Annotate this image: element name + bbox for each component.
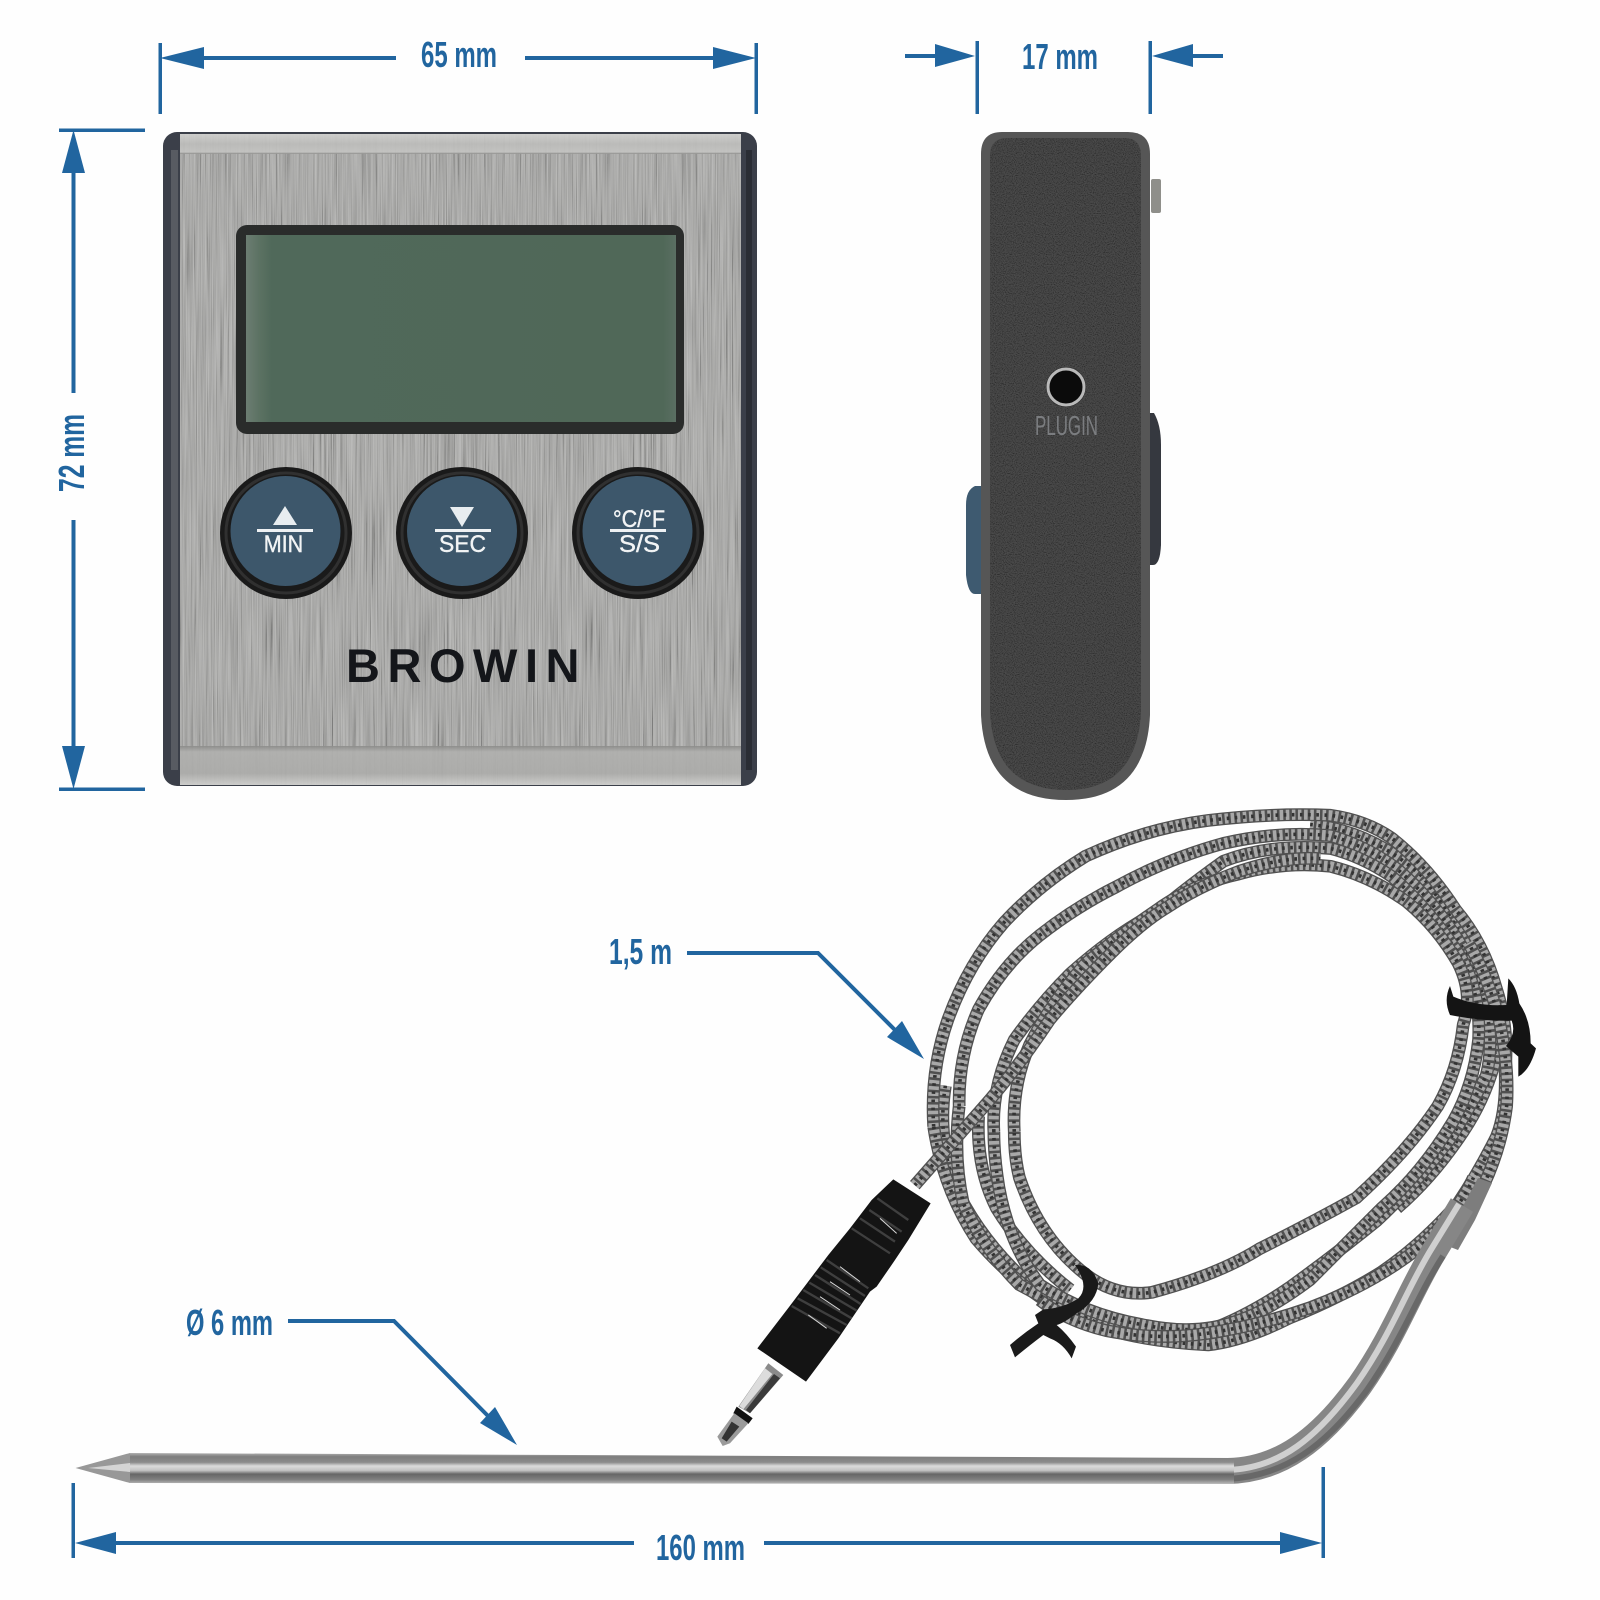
needle tip <box>76 1453 130 1483</box>
plastic body <box>163 132 757 786</box>
plug ribs <box>792 1198 908 1333</box>
PLUGIN label: PLUGIN <box>1035 410 1098 441</box>
callout: diameter 6 mm <box>186 1302 517 1445</box>
dimension: 160 mm length: 160 mm <box>656 1527 745 1568</box>
side texture <box>990 138 1141 790</box>
jack socket <box>1046 367 1086 407</box>
callout: 1,5 m cable length <box>609 931 924 1059</box>
cable tie: lower left <box>1010 1265 1098 1358</box>
cable sleeve <box>1440 1178 1492 1250</box>
button: SEC: SEC <box>439 531 486 558</box>
brand logo: BROWIN <box>346 639 580 692</box>
right button edge <box>1148 413 1161 565</box>
probe needle <box>76 1178 1492 1484</box>
thermometer front view <box>163 132 757 786</box>
braided probe cable <box>915 815 1507 1345</box>
dimension: 65 mm width: 65 mm <box>421 34 497 75</box>
needle shaft <box>130 1453 1234 1484</box>
dimension: 17 mm depth <box>905 36 1223 114</box>
needle bend <box>1228 1204 1462 1479</box>
button: C/F S/S: °C/°F <box>613 506 665 533</box>
thermometer side view <box>966 132 1161 800</box>
dimension: 65 mm width <box>158 34 758 114</box>
callout: diameter 6 mm: Ø 6 mm <box>186 1302 273 1343</box>
steel faceplate <box>180 134 741 785</box>
metal pin <box>717 1363 783 1446</box>
steel pin <box>1151 179 1161 213</box>
plug body <box>757 1179 931 1382</box>
jack plug <box>717 1179 931 1446</box>
button: C/F S/S <box>572 467 704 599</box>
left button edge <box>966 486 983 594</box>
button: SEC <box>396 467 528 599</box>
LCD display <box>236 225 684 434</box>
dimension: 160 mm length <box>72 1467 1325 1568</box>
side body <box>981 132 1150 800</box>
callout: 1,5 m cable length: 1,5 m <box>609 931 672 972</box>
dimension: 17 mm depth: 17 mm <box>1022 36 1098 77</box>
button: MIN: MIN <box>264 531 303 558</box>
dimension: 72 mm height <box>51 128 145 791</box>
button: MIN <box>220 467 352 599</box>
dimension: 72 mm height: 72 mm <box>51 414 92 492</box>
cable tie: upper right <box>1447 978 1536 1077</box>
button: C/F S/S: S/S <box>619 531 660 558</box>
